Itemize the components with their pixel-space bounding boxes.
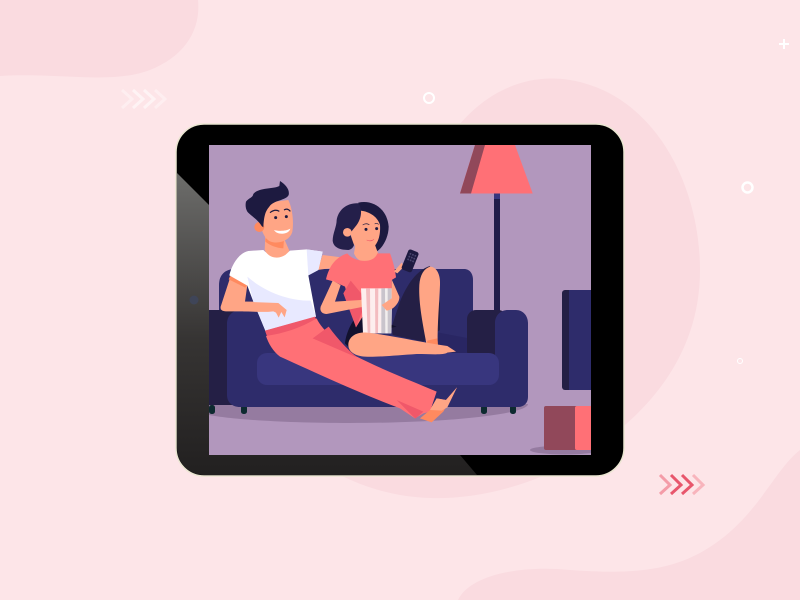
man neck shadow bbox=[265, 238, 284, 248]
chevrons: top left bbox=[122, 90, 165, 108]
woman neck bbox=[354, 245, 378, 262]
left front arm and base bbox=[227, 310, 528, 407]
right rear arm bbox=[467, 310, 502, 355]
people traced at 3x bbox=[221, 181, 457, 422]
man foot highlight bbox=[430, 387, 457, 411]
man foot bbox=[420, 387, 457, 422]
woman raised leg dark side bbox=[392, 266, 440, 342]
wall bbox=[209, 145, 591, 455]
woman shorts bbox=[345, 317, 396, 347]
decorative rings and sparkle bbox=[424, 39, 789, 364]
woman head bbox=[333, 203, 380, 251]
man upper arm bbox=[221, 276, 253, 311]
popcorn box bbox=[361, 288, 392, 333]
woman near arm bbox=[320, 280, 362, 314]
camera bbox=[190, 296, 198, 304]
man waistband bbox=[265, 317, 318, 340]
woman hand on popcorn bbox=[382, 279, 399, 311]
woman shirt bbox=[326, 253, 396, 327]
man neck bbox=[265, 235, 289, 258]
woman seated thigh bbox=[348, 333, 456, 357]
man shirt bbox=[229, 249, 323, 331]
woman hair back bbox=[357, 202, 389, 251]
seat cushion bbox=[257, 353, 499, 385]
tablet bbox=[176, 124, 624, 476]
background blob: top left bbox=[0, 0, 198, 77]
background blob: bottom right bbox=[458, 450, 800, 600]
tv stand bbox=[562, 290, 591, 390]
man head bbox=[246, 181, 293, 242]
sofa shadow bbox=[209, 404, 528, 423]
chevrons: bottom right bbox=[660, 475, 703, 494]
tablet glare bbox=[177, 173, 477, 475]
woman far hand bbox=[394, 263, 404, 273]
man forearm and hand bbox=[243, 302, 287, 318]
woman raised leg bbox=[419, 267, 440, 345]
remote bbox=[401, 249, 419, 273]
floor lamp bbox=[460, 145, 533, 313]
man far arm bbox=[318, 255, 340, 270]
sofa legs bbox=[209, 405, 516, 414]
tablet frame bbox=[176, 124, 624, 476]
man trousers bbox=[266, 318, 437, 419]
screen scene bbox=[205, 145, 602, 455]
woman ankle shadow bbox=[427, 338, 438, 345]
sofa bbox=[205, 269, 528, 414]
sofa back bbox=[219, 269, 473, 354]
box shadow bbox=[530, 446, 591, 454]
left rear arm bbox=[209, 310, 234, 405]
sofa back shadow bbox=[438, 332, 464, 338]
background blob: centre bbox=[340, 79, 700, 498]
box bbox=[544, 406, 595, 450]
